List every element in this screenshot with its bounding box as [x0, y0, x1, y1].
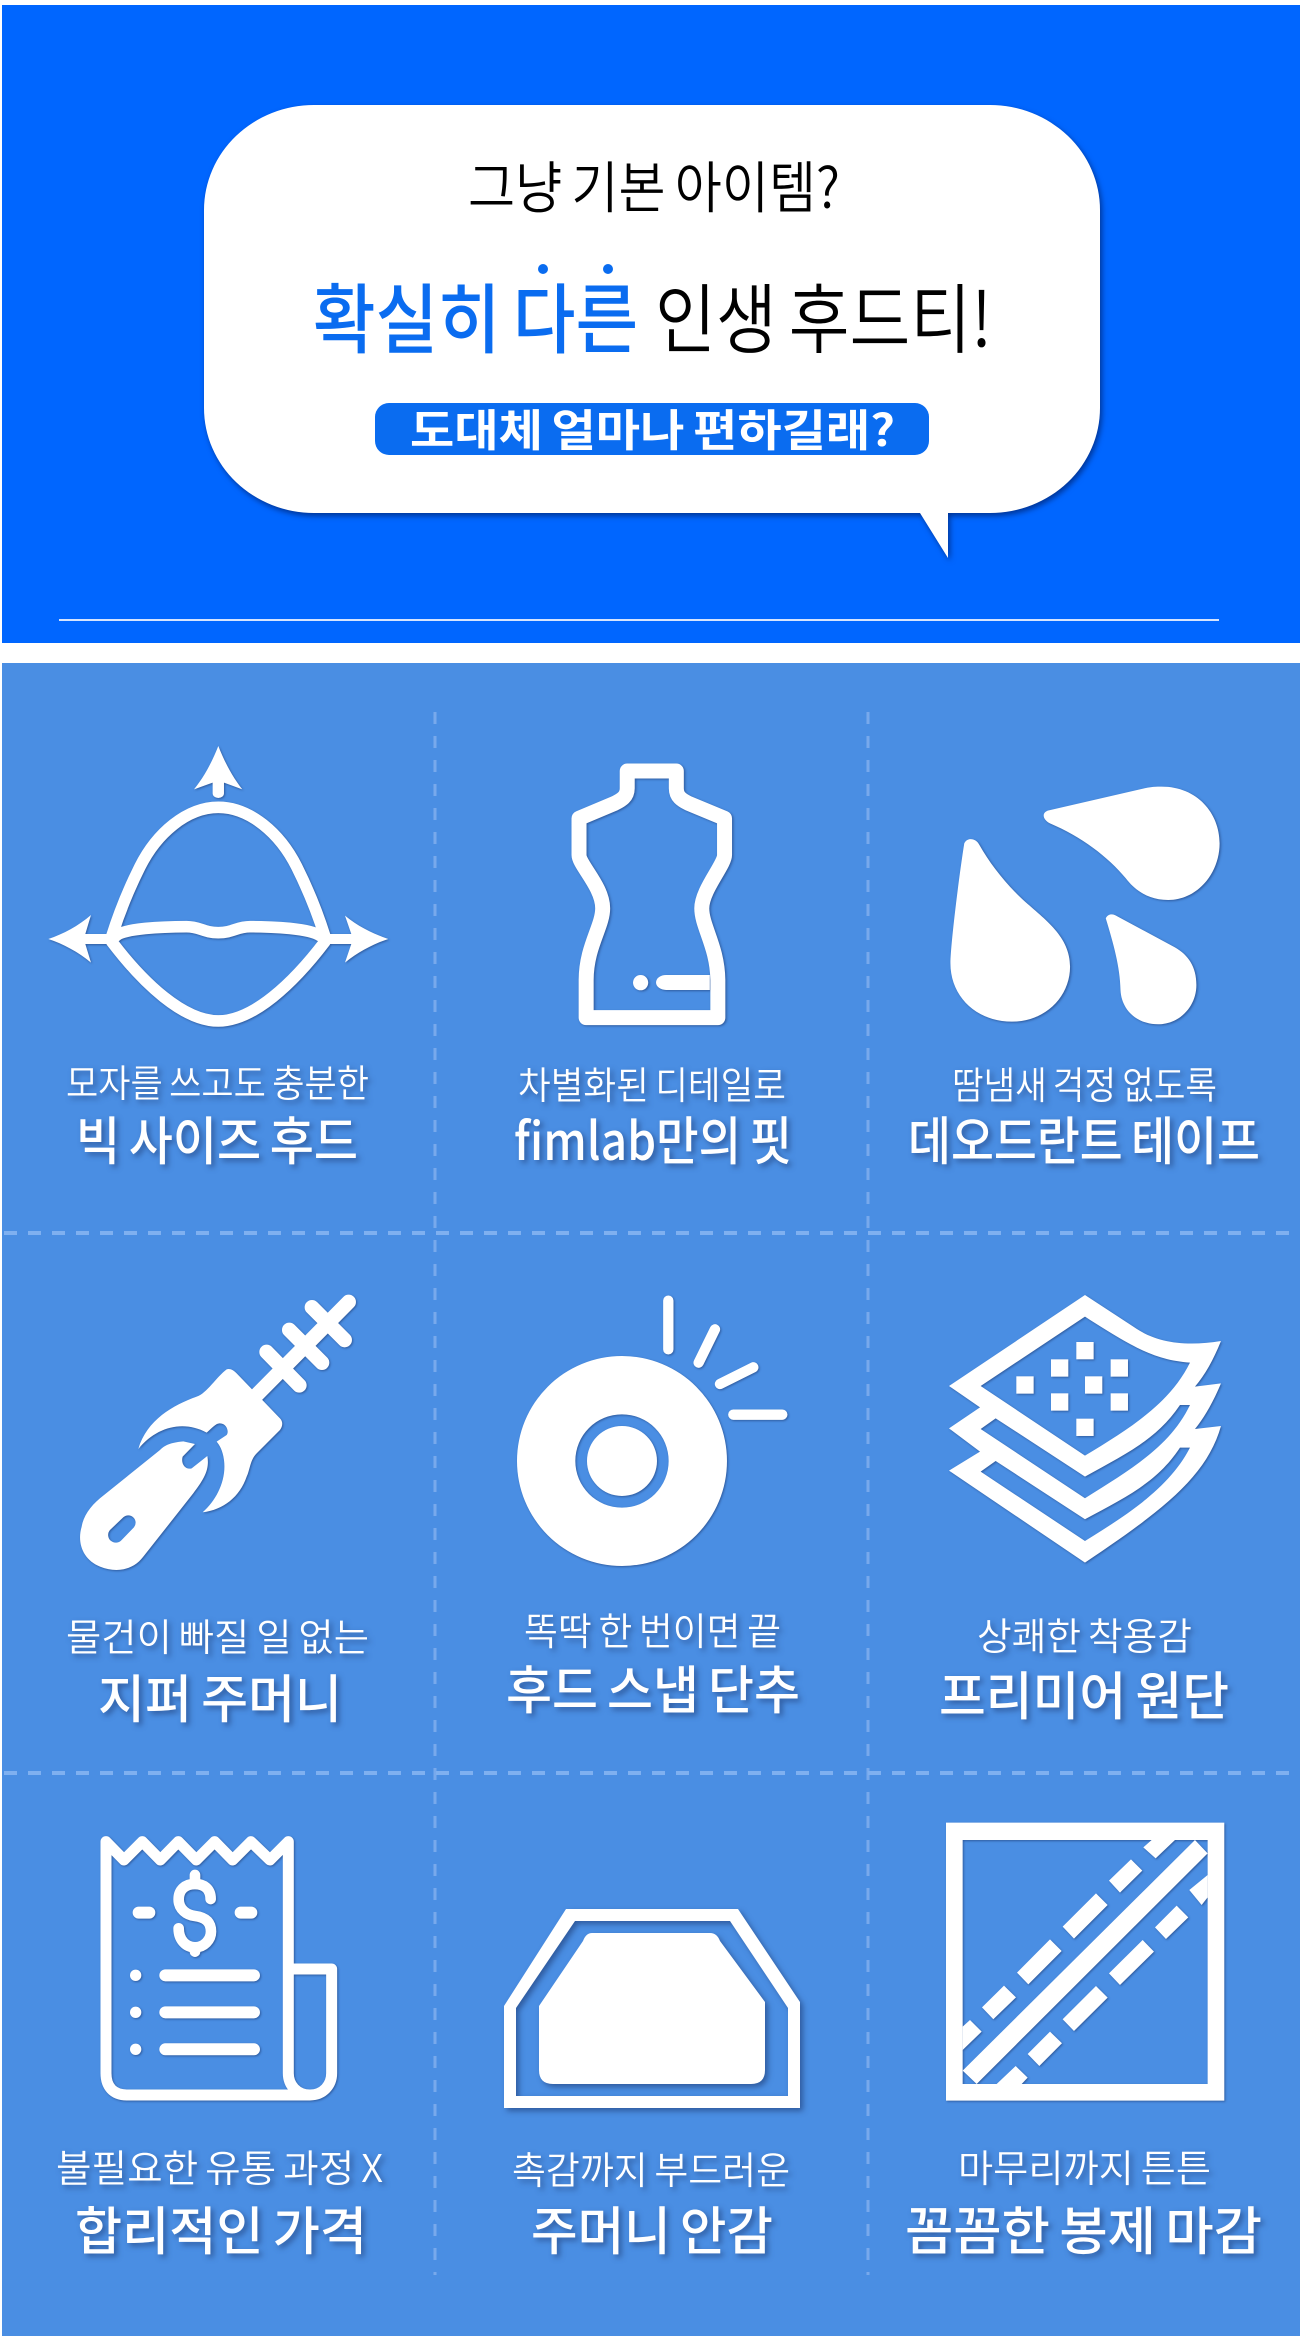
icon: pocket lining: [504, 1909, 800, 2108]
heading: second phrase: 인생 후드티!: [655, 259, 992, 369]
feature text: hood snap button: 똑딱 한 번이면 끝: [524, 1601, 781, 1656]
speech bubble: [204, 105, 1100, 558]
feature text: stitching finish: 마무리까지 튼튼: [958, 2138, 1211, 2193]
feature text: hood snap button: 후드 스냅 단추: [506, 1649, 800, 1724]
icon: snap button: [517, 1301, 782, 1566]
feature text: big hood: 빅 사이즈 후드: [76, 1100, 358, 1175]
panel: header: [2, 5, 1300, 643]
icon: receipt: [106, 1842, 332, 2095]
feature text: pocket lining: 촉감까지 부드러운: [512, 2140, 790, 2195]
feature text: pocket lining: 주머니 안감: [531, 2190, 773, 2265]
feature text: stitching finish: 꼼꼼한 봉제 마감: [905, 2190, 1262, 2265]
feature text: deodorant tape: 땀냄새 걱정 없도록: [952, 1055, 1217, 1110]
feature text: premium fabric: 상쾌한 착용감: [977, 1606, 1192, 1661]
icon: mannequin: [579, 771, 725, 1018]
feature text: fimlab fit: [514, 1055, 792, 1175]
feature text: premium fabric: [939, 1606, 1229, 1730]
feature text: big hood: 모자를 쓰고도 충분한: [66, 1053, 369, 1108]
feature text: reasonable price: 불필요한 유통 과정 X: [56, 2138, 383, 2193]
icon: fabric layers: [949, 1295, 1221, 1563]
feature text: premium fabric: 프리미어 원단: [939, 1655, 1229, 1730]
feature text: zipper pocket: 지퍼 주머니: [98, 1658, 342, 1733]
feature text: deodorant tape: 데오드란트 테이프: [908, 1100, 1260, 1175]
icon: sweat drops: [950, 787, 1220, 1024]
icon: stitching: [946, 1823, 1224, 2101]
panel: features: [2, 663, 1300, 2336]
feature text: reasonable price: 합리적인 가격: [75, 2190, 367, 2265]
pill: question: 도대체 얼마나 편하길래?: [410, 395, 895, 459]
feature text: fimlab fit: fimlab만의 핏: [514, 1100, 792, 1175]
feature text: reasonable price: [56, 2138, 383, 2265]
feature text: hood snap button: [506, 1601, 800, 1724]
feature text: pocket lining: [512, 2140, 790, 2265]
icon: zipper: [80, 1302, 349, 1570]
heading: first line: 그냥 기본 아이템?: [468, 144, 840, 225]
feature text: zipper pocket: [66, 1607, 369, 1733]
heading: highlighted phrase: 확실히 다른: [313, 259, 638, 369]
feature text: stitching finish: [905, 2138, 1262, 2265]
icon: hood size: [48, 746, 388, 1021]
feature text: fimlab fit: 차별화된 디테일로: [518, 1055, 786, 1110]
feature text: big hood: [66, 1053, 369, 1175]
feature text: deodorant tape: [908, 1055, 1260, 1175]
feature text: zipper pocket: 물건이 빠질 일 없는: [66, 1607, 369, 1662]
